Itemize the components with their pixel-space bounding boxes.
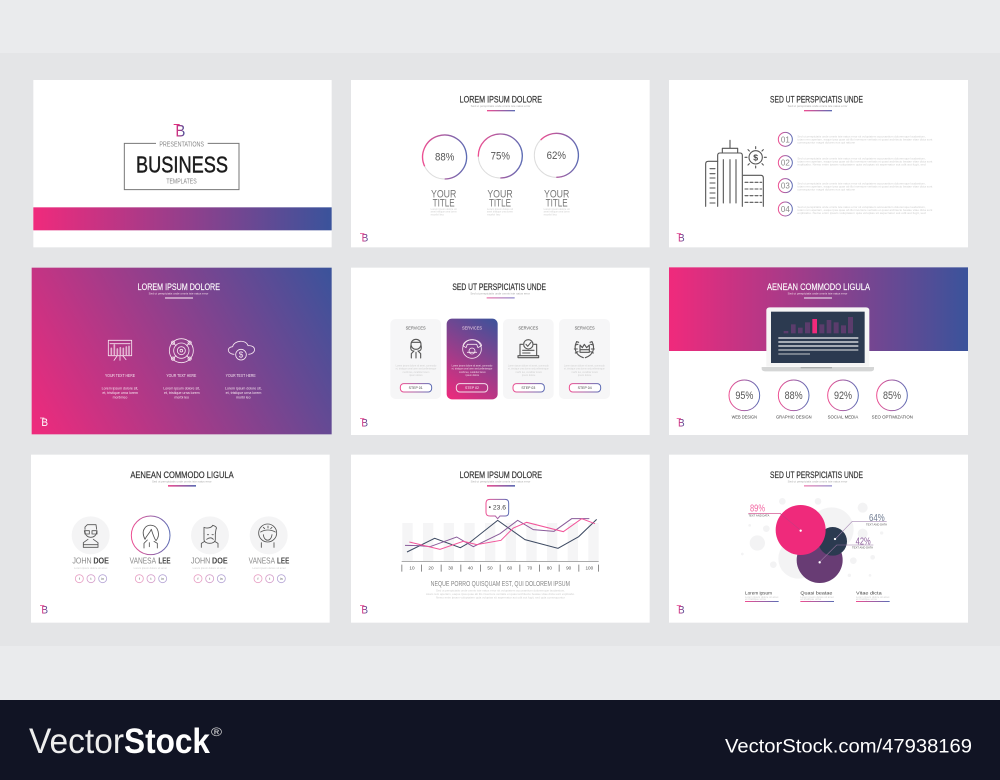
skill graphic design	[776, 380, 812, 419]
column 3 text: Lorem ipsum dolore sit,	[225, 387, 262, 391]
legend item 2: et tristique urna	[800, 597, 822, 601]
service card 4	[559, 319, 610, 399]
label 42%: TEXT AND DATA	[852, 546, 873, 550]
list item 02: totam rem aperiam, eaque ipsa quae ab illo inventore veritatis et quasi architecto beatae vitae dicta sunt	[797, 160, 933, 164]
line chart: 40	[468, 566, 473, 571]
skill seo optimization	[872, 380, 913, 419]
heading underline	[487, 110, 515, 111]
chart caption: NEQUE PORRO QUISQUAM EST, QUI DOLOREM IPSUM	[431, 581, 570, 588]
legend item 1	[745, 590, 779, 602]
panel: venn circles slide	[669, 455, 968, 623]
value callout: • 23.6	[489, 505, 507, 511]
list item 04	[778, 202, 933, 216]
column 1 text: Lorem ipsum dolore sit,	[102, 387, 138, 391]
heading underline	[168, 485, 196, 487]
subheading: Sed ut perspiciatis unde omnis iste natus error	[152, 479, 212, 483]
heading: AENEAN COMMODO LIGULA	[130, 470, 234, 480]
heading underline	[804, 485, 832, 487]
column 2 title: amet tristique urna lorem	[487, 210, 514, 214]
team member 3: f	[198, 577, 199, 581]
column 2 title: morbi leo	[487, 212, 501, 216]
team member 1: Lorem ipsum dolore sit amet	[74, 566, 108, 570]
column 1 text: YOUR TEXT HERE	[105, 373, 135, 378]
service card 4: Lorem ipsum dolore sit amet, commodo	[564, 363, 605, 367]
subheading: Sed ut perspiciatis unde omnis iste natus error	[471, 104, 530, 108]
list item 01	[778, 132, 933, 146]
subheading: Sed ut perspiciatis unde omnis iste natus error	[470, 291, 530, 295]
line chart	[402, 519, 599, 572]
service card 2 highlighted: SERVICES	[462, 325, 483, 331]
subheading: Sed ut perspiciatis unde omnis iste natus error	[788, 479, 847, 483]
team member 2: f	[139, 577, 140, 581]
logo: B	[175, 121, 185, 140]
line chart: 50	[487, 566, 493, 571]
column 2 title	[487, 188, 514, 216]
heading: AENEAN COMMODO LIGULA	[767, 282, 871, 292]
column 1 text	[102, 373, 138, 399]
value callout	[486, 499, 509, 519]
column 3 text: YOUR TEXT HERE	[226, 373, 256, 378]
team member 4: in	[280, 577, 283, 581]
gradient header	[669, 267, 968, 351]
laptop illustration	[762, 307, 874, 371]
team member 2: in	[161, 577, 164, 581]
list item 01: 01	[781, 135, 790, 144]
column 1 title	[431, 188, 457, 216]
legend item 1: et tristique urna	[745, 597, 766, 601]
circle 64% navy	[818, 527, 847, 556]
skill web design: WEB DESIGN	[732, 414, 757, 419]
icon: gear ring	[169, 339, 193, 363]
skill graphic design: GRAPHIC DESIGN	[776, 414, 812, 419]
series: purple	[405, 519, 589, 547]
legend item 2: Lorem ipsum dolore sit amet	[800, 595, 834, 599]
heading underline	[804, 297, 832, 299]
column 3 title: morbi leo	[544, 212, 558, 216]
service card 4: et, tristique urna lorem sed pellentesque	[564, 367, 605, 371]
column 3 title	[544, 188, 570, 216]
panel: services slide	[351, 268, 650, 435]
chart caption: Sed ut perspiciatis unde omnis iste natus error sit voluptatem accusantium doloremque laudantium,	[436, 588, 565, 592]
team member 4	[249, 516, 290, 583]
panel: cover slide	[33, 80, 332, 247]
team member 1: t	[91, 577, 92, 581]
list item 03: totam rem aperiam, eaque ipsa quae ab illo inventore veritatis et quasi architecto beatae vitae dicta sunt	[797, 185, 933, 189]
skill graphic design: 88%	[785, 390, 803, 402]
ring 62%	[534, 133, 578, 177]
laptop bar chart	[784, 317, 853, 333]
list item 02: explicabo. Nemo enim ipsam voluptatem quia voluptas sit aspernatur aut odit aut fugit, sed	[797, 163, 926, 167]
business heading: BUSINESS	[136, 152, 228, 178]
list item 04: explicabo. Nemo enim ipsam voluptatem quia voluptas sit aspernatur aut odit aut fugit, sed	[797, 211, 926, 215]
heading underline	[487, 485, 515, 487]
column 2 title: TITLE	[489, 197, 511, 209]
connector lines and markers	[748, 513, 887, 563]
legend item 3	[856, 590, 890, 602]
team member 4: VANESA	[249, 557, 276, 566]
skill web design: 95%	[735, 390, 754, 402]
column 2 text	[163, 373, 200, 399]
column 2 title: YOUR	[487, 188, 513, 200]
team member 2: Lorem ipsum dolore sit amet	[134, 566, 167, 570]
label 42%: 42%	[856, 536, 871, 547]
column 1 title: Lorem ipsum dolore sit	[431, 207, 457, 211]
service card 4: ipsum dolore	[578, 373, 592, 377]
service card 2 highlighted	[447, 319, 498, 399]
vectorstock logo	[29, 722, 222, 761]
service card 1: SERVICES	[406, 325, 426, 331]
ring 88%: 88%	[435, 152, 454, 164]
templates label: TEMPLATES	[166, 178, 197, 185]
list item 02: Sed ut perspiciatis unde omnis iste natus error sit voluptatem accusantium doloremque laudantium,	[797, 157, 926, 161]
legend item 1: Lorem ipsum	[745, 590, 772, 596]
logo: B	[41, 417, 48, 429]
logo: B	[41, 604, 48, 616]
team member 3: in	[220, 577, 223, 581]
heading underline	[804, 110, 832, 111]
line chart: 70	[527, 566, 533, 571]
ring 88%	[423, 135, 467, 179]
column 3 text: morbi leo	[236, 395, 251, 399]
subheading: Sed ut perspiciatis unde omnis iste natus error	[788, 291, 847, 295]
team member 4: LEE	[277, 557, 290, 566]
column 2 title: Lorem ipsum dolore sit	[487, 207, 513, 211]
chart caption	[426, 581, 575, 600]
panel: line chart slide	[351, 455, 650, 623]
ring 75%	[478, 134, 522, 178]
column 1 title: morbi leo	[431, 212, 445, 216]
team member 1: JOHN	[72, 557, 92, 566]
series: pink	[409, 519, 595, 549]
column 3 text: et, tristique urna lorem	[226, 391, 262, 395]
line chart: 100	[585, 566, 594, 571]
logo: B	[362, 233, 368, 245]
team member 4: t	[269, 577, 270, 581]
chart caption: Nemo enim ipsam voluptatem quia voluptas sit aspernatur aut odit aut fugit, sed quia consequuntur	[436, 596, 565, 600]
line chart: 30	[448, 566, 454, 571]
series: dark	[407, 519, 597, 552]
skill seo optimization: 85%	[883, 390, 901, 402]
icon: presentation board	[108, 340, 132, 360]
line chart: 60	[507, 566, 513, 571]
column 1 title: amet tristique urna lorem	[431, 210, 457, 214]
column 3 title: YOUR	[544, 188, 570, 200]
list item 04: totam rem aperiam, eaque ipsa quae ab illo inventore veritatis et quasi architecto beatae vitae dicta sunt	[797, 208, 933, 212]
team member 3: t	[209, 577, 210, 581]
label 89%: TEXT AND DATA	[748, 513, 769, 517]
line chart: 20	[428, 566, 434, 571]
heading: SED UT PERSPICIATIS UNDE	[770, 470, 863, 480]
line chart: 10	[409, 566, 415, 571]
team member 1: f	[79, 577, 80, 581]
service card 2 highlighted: STEP 02	[465, 385, 480, 390]
panel: percentage circles slide	[351, 80, 650, 247]
logo: B	[678, 417, 685, 429]
label 64%	[866, 513, 887, 526]
column 1 title: YOUR	[431, 188, 457, 200]
legend item 1: Lorem ipsum dolore sit amet	[745, 595, 779, 599]
chart caption: totam rem aperiam, eaque ipsa quae ab illo inventore veritatis et quasi architecto beatae vitae dicta sunt explicabo	[426, 592, 575, 596]
column 3 text	[225, 373, 262, 399]
team member 4: f	[258, 577, 259, 581]
laptop text lines	[778, 337, 858, 355]
vectorstock logo: Stock	[124, 722, 210, 761]
service card 1: morbi leo, curabitur lorem	[403, 370, 430, 374]
team member 1: in	[101, 577, 104, 581]
team member 2: VANESA	[130, 557, 157, 566]
list item 04: 04	[781, 205, 790, 214]
list item 03: consequuntur magni dolores eos qui ratione	[797, 188, 856, 192]
legend item 3: et tristique urna	[856, 597, 877, 601]
legend item 3: Vitae dicta	[856, 590, 882, 596]
list item 04: Sed ut perspiciatis unde omnis iste natus error sit voluptatem accusantium doloremque laudantium,	[797, 205, 926, 209]
team member 4: Lorem ipsum dolore sit amet	[252, 566, 286, 570]
panel: laptop skills slide	[669, 267, 968, 435]
service card 4: SERVICES	[575, 325, 595, 331]
icon: cloud with dollar coin	[228, 341, 255, 360]
team member 1: DOE	[93, 557, 110, 566]
panel: gradient icons slide	[32, 268, 332, 434]
background dots	[741, 498, 883, 579]
service card 4: morbi leo, curabitur lorem	[571, 370, 599, 374]
service card 4: STEP 04	[578, 385, 592, 390]
list item 01: totam rem aperiam, eaque ipsa quae ab illo inventore veritatis et quasi architecto beatae vitae dicta sunt	[797, 137, 933, 141]
subheading: Sed ut perspiciatis unde omnis iste natus error	[149, 291, 208, 295]
team member 3: Lorem ipsum dolore sit amet	[193, 566, 226, 570]
service card 1: Lorem ipsum dolore sit amet, commodo	[396, 363, 437, 367]
list item 03: Sed ut perspiciatis unde omnis iste natus error sit voluptatem accusantium doloremque laudantium,	[797, 182, 926, 186]
service card 2 highlighted: morbi leo, curabitur lorem	[459, 370, 486, 374]
circle 42% purple	[797, 537, 843, 583]
skill social media: 92%	[834, 390, 852, 402]
column 2 text: morbi leo	[174, 395, 189, 399]
heading underline	[165, 297, 193, 299]
panel: numbered list slide	[669, 80, 968, 247]
icon: city buildings with dollar sun: $	[753, 152, 758, 162]
team member 3	[191, 516, 229, 583]
service card 1: ipsum dolore	[409, 373, 423, 377]
service card 2 highlighted: Lorem ipsum dolore sit amet, commodo	[452, 363, 493, 367]
column 1 title: TITLE	[433, 197, 455, 209]
ring 75%: 75%	[491, 151, 510, 163]
label 64%: 64%	[869, 513, 885, 524]
panel: team slide	[31, 455, 330, 623]
label 64%: TEXT AND DATA	[866, 522, 887, 526]
team member 3: DOE	[212, 557, 228, 566]
label 42%	[852, 536, 873, 550]
logo: B	[678, 233, 685, 245]
heading underline	[487, 297, 515, 299]
service card 1	[390, 319, 441, 399]
service card 3: STEP 03	[521, 385, 536, 390]
legend item 3: Lorem ipsum dolore sit amet	[856, 595, 890, 599]
list item 02: 02	[781, 159, 790, 168]
subheading: Sed ut perspiciatis unde omnis iste natus error	[471, 479, 530, 483]
column 3 title: amet tristique urna lorem	[544, 210, 570, 214]
presentations label: PRESENTATIONS	[159, 141, 204, 148]
team member 3: JOHN	[191, 557, 211, 566]
service card 3	[503, 319, 554, 399]
vectorstock logo: Vector	[29, 722, 124, 761]
label 89%: 89%	[750, 503, 765, 514]
logo: B	[678, 604, 685, 616]
team member 2	[130, 516, 171, 583]
circle 89% pink	[776, 505, 826, 555]
logo: B	[361, 417, 368, 429]
vectorstock logo: ®	[211, 725, 222, 739]
team member 1	[72, 516, 110, 583]
column 1 text: et, tristique urna lorem	[102, 391, 138, 395]
heading: SED UT PERSPICIATIS UNDE	[452, 282, 546, 292]
column 3 title: TITLE	[546, 197, 568, 209]
legend item 2: Quasi beatae	[800, 590, 833, 596]
column 2 text: Lorem ipsum dolore sit,	[163, 387, 200, 391]
icon: cloud with dollar coin: $	[239, 351, 244, 360]
service card 1: STEP 01	[409, 385, 423, 390]
list item 01: Sed ut perspiciatis unde omnis iste natus error sit voluptatem accusantium doloremque laudantium,	[797, 134, 926, 138]
service card 2 highlighted: et, tristique urna lorem sed pellentesque	[452, 367, 493, 371]
list item 03: 03	[781, 182, 790, 191]
column 3 title: Lorem ipsum dolore sit	[544, 207, 570, 211]
team member 2: t	[151, 577, 152, 581]
column 2 text: YOUR TEXT HERE	[166, 373, 196, 378]
skill social media	[828, 380, 858, 419]
heading: LOREM IPSUM DOLORE	[460, 470, 542, 480]
service card 3: Lorem ipsum dolore sit amet, commodo	[508, 363, 549, 367]
gradient band	[33, 207, 332, 230]
service card 2 highlighted: ipsum dolore	[466, 373, 479, 377]
skill social media: SOCIAL MEDIA	[828, 414, 858, 419]
heading: SED UT PERSPICIATIS UNDE	[770, 94, 863, 104]
skill seo optimization: SEO OPTIMIZATION	[872, 414, 913, 419]
legend item 2	[800, 590, 834, 602]
icon: city buildings with dollar sun	[706, 140, 766, 206]
service card 3: SERVICES	[518, 325, 539, 331]
column 1 text: morbi leo	[113, 395, 127, 399]
image id url: VectorStock.com/47938169	[725, 736, 972, 758]
line chart: 90	[566, 566, 572, 571]
service card 3: morbi leo, curabitur lorem	[515, 370, 543, 374]
line chart: 80	[547, 566, 552, 571]
title frame	[124, 143, 239, 190]
list item 01: consequuntur magni dolores eos qui ratione	[797, 140, 856, 144]
service card 1: et, tristique urna lorem sed pellentesque	[396, 367, 437, 371]
heading: LOREM IPSUM DOLORE	[138, 282, 220, 292]
skill web design	[729, 380, 760, 419]
team member 2: LEE	[158, 557, 171, 566]
list item 03	[778, 179, 933, 193]
logo: B	[361, 604, 368, 616]
service card 3: et, tristique urna lorem sed pellentesque	[508, 367, 549, 371]
subheading: Sed ut perspiciatis unde omnis iste natus error	[788, 104, 847, 108]
service card 3: ipsum dolore	[522, 373, 536, 377]
ring 62%: 62%	[547, 150, 566, 162]
column 2 text: et, tristique urna lorem	[164, 391, 200, 395]
list item 02	[778, 156, 933, 170]
footer watermark bar	[0, 700, 1000, 780]
heading: LOREM IPSUM DOLORE	[460, 94, 542, 104]
